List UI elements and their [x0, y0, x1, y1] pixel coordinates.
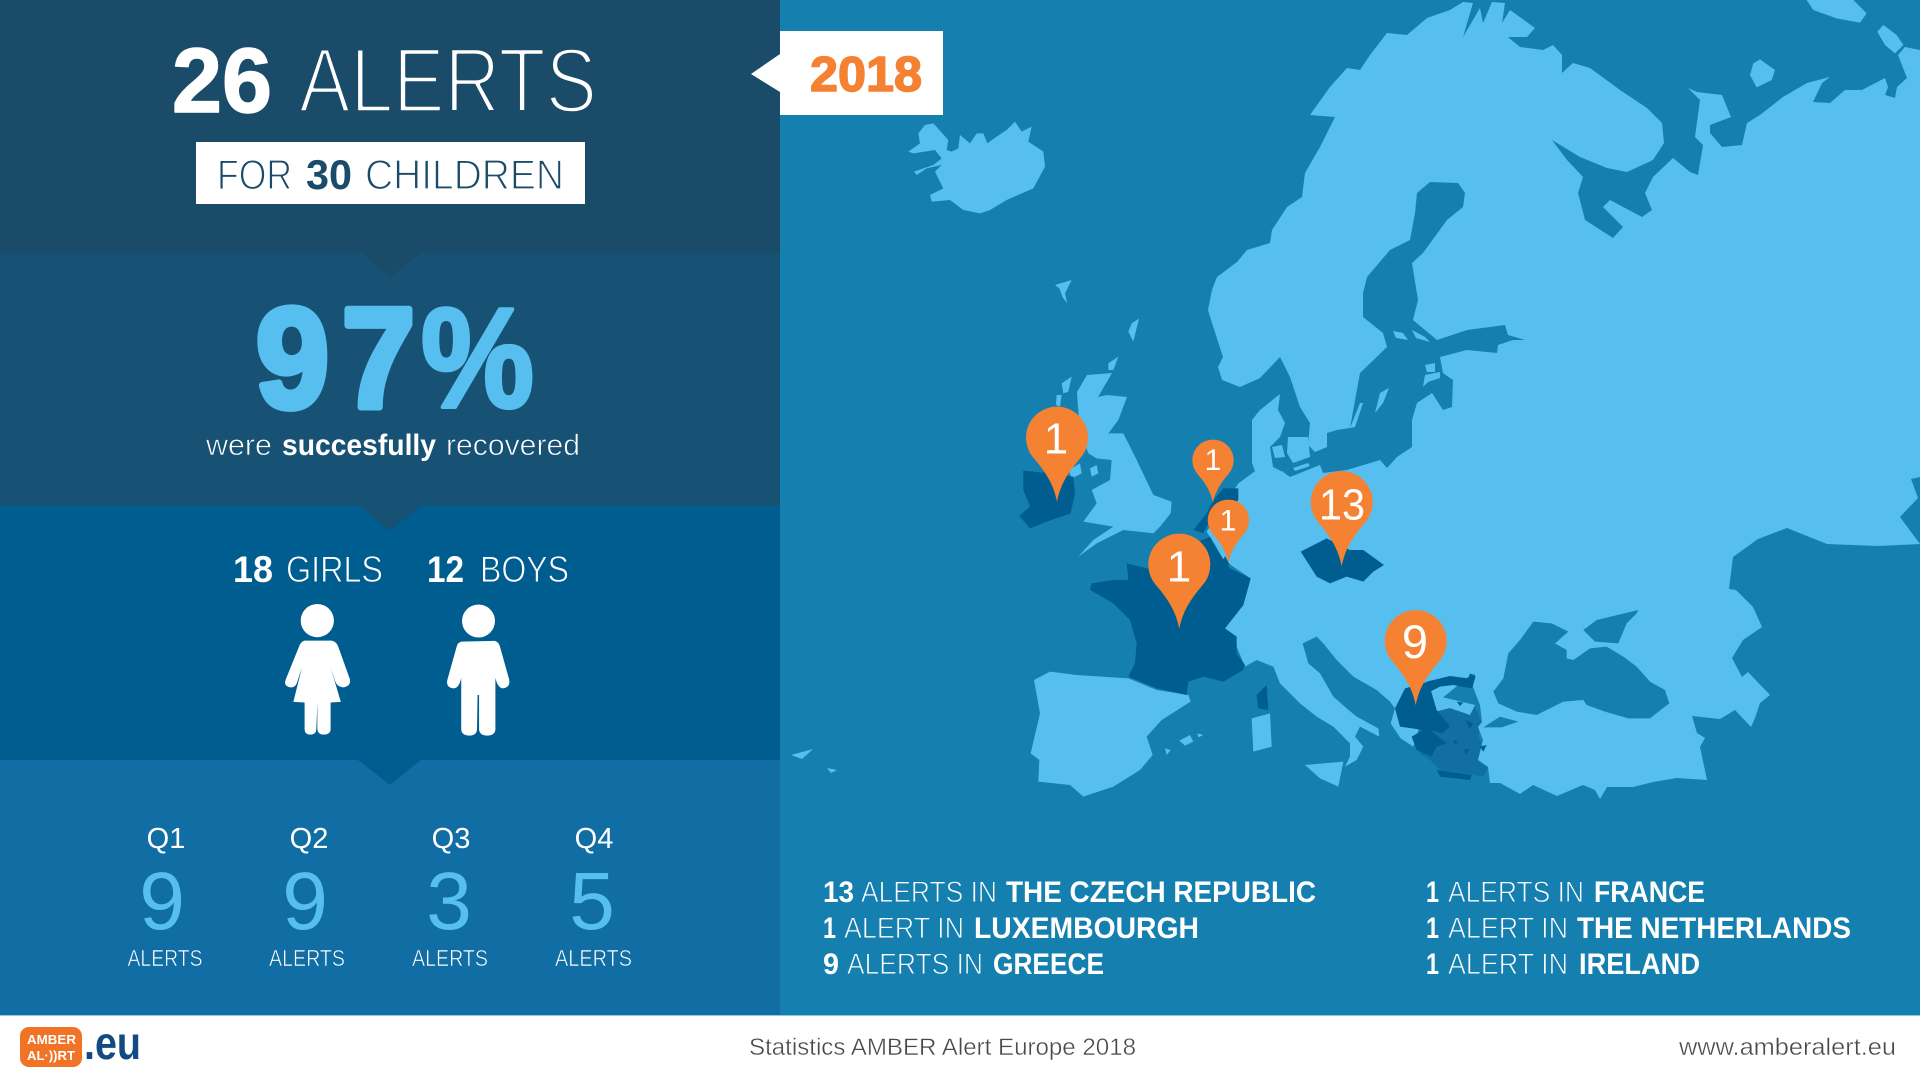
subtitle box: for 30 children: CHILDREN	[365, 151, 564, 198]
line: France	[1426, 876, 1705, 909]
stat: 97%	[256, 279, 534, 438]
label: 12 boys	[427, 549, 569, 590]
Q1 column	[128, 823, 202, 971]
panel: quarterly alerts	[0, 760, 780, 1015]
Q2 column: ALERTS	[269, 945, 345, 971]
Q1 column: Q1	[147, 823, 185, 855]
islands: Canaries	[791, 749, 837, 773]
notch arrow to recovery panel	[362, 253, 421, 277]
Q4 column: Q4	[575, 823, 613, 855]
year tag: 2018	[751, 31, 943, 115]
line: Czech Republic: ALERTS IN	[861, 876, 997, 909]
title: 26 alerts: 26	[172, 30, 272, 132]
line: Czech Republic	[823, 876, 1316, 909]
label: 18 girls	[233, 549, 383, 590]
islands: Arctic	[1750, 0, 1903, 87]
Q2 column: Q2	[290, 823, 328, 855]
sea: Baltic and Gulf of Bothnia	[1283, 182, 1525, 477]
line: Greece: ALERTS IN	[847, 948, 983, 981]
Q4 column: ALERTS	[555, 945, 632, 971]
land: western Europe, Italy, Balkans, Spain, Britain and islands	[1031, 373, 1480, 820]
line: France: FRANCE	[1594, 876, 1705, 909]
logo: AMBER Alert .eu: AL·))RT	[27, 1048, 75, 1063]
pin: Czech Republic 13: 13	[1319, 480, 1365, 529]
pin: Ireland 1: 1	[1044, 414, 1068, 464]
island: Iceland	[908, 122, 1045, 213]
pin: Netherlands 1: 1	[1205, 444, 1221, 477]
highlighted countries	[1019, 471, 1487, 780]
country: Ireland	[1019, 471, 1075, 528]
caption: were successfully recovered: recovered	[446, 429, 580, 462]
subtitle box: for 30 children	[196, 142, 585, 204]
country: Luxembourg	[1222, 556, 1230, 565]
caption: were successfully recovered	[205, 429, 580, 462]
country: Greece	[1395, 682, 1487, 780]
notch arrow to quarters	[358, 760, 421, 785]
line: France: 1	[1426, 876, 1439, 909]
line: Netherlands: ALERT IN	[1448, 912, 1568, 945]
pin: Netherlands 1	[1192, 440, 1234, 503]
title: 26 alerts	[172, 30, 597, 132]
Q3 column	[412, 823, 488, 971]
line: Ireland: 1	[1426, 948, 1439, 981]
country: Netherlands	[1193, 488, 1238, 533]
panel: recovery rate	[0, 253, 780, 531]
notch arrow to gender panel	[360, 506, 421, 531]
line: Greece	[823, 948, 1104, 981]
seas: Black Sea, Azov and Marmara	[1427, 610, 1669, 727]
title: 26 alerts: ALERTS	[299, 30, 597, 132]
line: Luxembourg: 1	[823, 912, 836, 945]
pin: France 1: 1	[1167, 543, 1191, 592]
panel: girls and boys	[0, 506, 780, 785]
icon: girl	[285, 604, 350, 735]
label: 12 boys: 12	[427, 549, 464, 590]
pin: Czech Republic 13	[1311, 471, 1373, 566]
line: Czech Republic: THE CZECH REPUBLIC	[1006, 876, 1316, 909]
line: France: ALERTS IN	[1448, 876, 1584, 909]
panel: total alerts	[0, 0, 780, 277]
line: Luxembourg: ALERT IN	[844, 912, 964, 945]
line: Netherlands: 1	[1426, 912, 1439, 945]
line: Netherlands: THE NETHERLANDS	[1577, 912, 1851, 945]
land: north Aegean patch	[1425, 693, 1475, 715]
pin: Ireland 1	[1026, 407, 1088, 502]
stat: 97%: 9	[256, 279, 329, 438]
year tag: 2018: 2018	[810, 48, 922, 102]
Q3 column: Q3	[432, 823, 470, 855]
line: Greece: 9	[823, 948, 839, 981]
footer	[0, 1015, 1920, 1080]
line: Greece: GREECE	[993, 948, 1104, 981]
Q3 column: ALERTS	[412, 945, 488, 971]
footer url: www.amberalert.eu	[1678, 1034, 1896, 1061]
country: Corsica	[1257, 685, 1268, 710]
pin: France 1	[1148, 534, 1210, 629]
subtitle box: for 30 children: FOR	[217, 151, 292, 198]
Q1 column: 9	[139, 856, 185, 947]
islands: Baltic and Denmark	[1272, 330, 1440, 471]
label: 18 girls: GIRLS	[286, 549, 383, 590]
logo: AMBER Alert .eu	[20, 1017, 141, 1069]
stat: 97%: %	[421, 279, 534, 438]
label: 18 girls: 18	[233, 549, 273, 590]
sea: Aegean	[1420, 707, 1488, 777]
line: Czech Republic: 13	[823, 876, 854, 909]
Q3 column: 3	[426, 856, 472, 947]
stat: 97%: 7	[342, 279, 415, 438]
Q4 column: 5	[569, 856, 615, 947]
map of Europe	[791, 0, 1920, 820]
line: Luxembourg	[823, 912, 1199, 945]
panel: map	[780, 0, 1920, 1015]
pin: Luxembourg 1	[1208, 500, 1249, 563]
caption: were successfully recovered: were	[205, 429, 272, 462]
caption: were successfully recovered: succesfully	[282, 429, 436, 462]
label: 12 boys: BOYS	[480, 549, 569, 590]
logo: AMBER Alert .eu: AMBER	[27, 1032, 77, 1047]
pin: Greece 9	[1385, 610, 1447, 705]
alerts per country list	[823, 876, 1851, 981]
Q1 column: ALERTS	[128, 945, 202, 971]
Q2 column: 9	[282, 856, 328, 947]
pin: Luxembourg 1: 1	[1220, 505, 1236, 538]
logo: AMBER Alert .eu: .eu	[84, 1017, 141, 1069]
line: Luxembourg: LUXEMBOURGH	[974, 912, 1199, 945]
Q2 column	[269, 823, 345, 971]
land: Scandinavia, Russia, eastern Europe and Turkey	[1208, 2, 1920, 799]
country: Czech Republic	[1301, 538, 1384, 583]
line: Ireland: IRELAND	[1579, 948, 1700, 981]
islands: Faroe, Shetland, Orkney, Hebrides	[1055, 280, 1139, 407]
pin: Greece 9: 9	[1402, 615, 1428, 668]
country: France	[1090, 537, 1251, 695]
footer caption: Statistics AMBER Alert Europe 2018	[749, 1034, 1136, 1061]
line: Ireland: ALERT IN	[1448, 948, 1568, 981]
subtitle box: for 30 children: 30	[306, 151, 352, 198]
line: Ireland	[1426, 948, 1700, 981]
Q4 column	[555, 823, 632, 971]
icon: boy	[447, 604, 509, 736]
line: Netherlands	[1426, 912, 1851, 945]
